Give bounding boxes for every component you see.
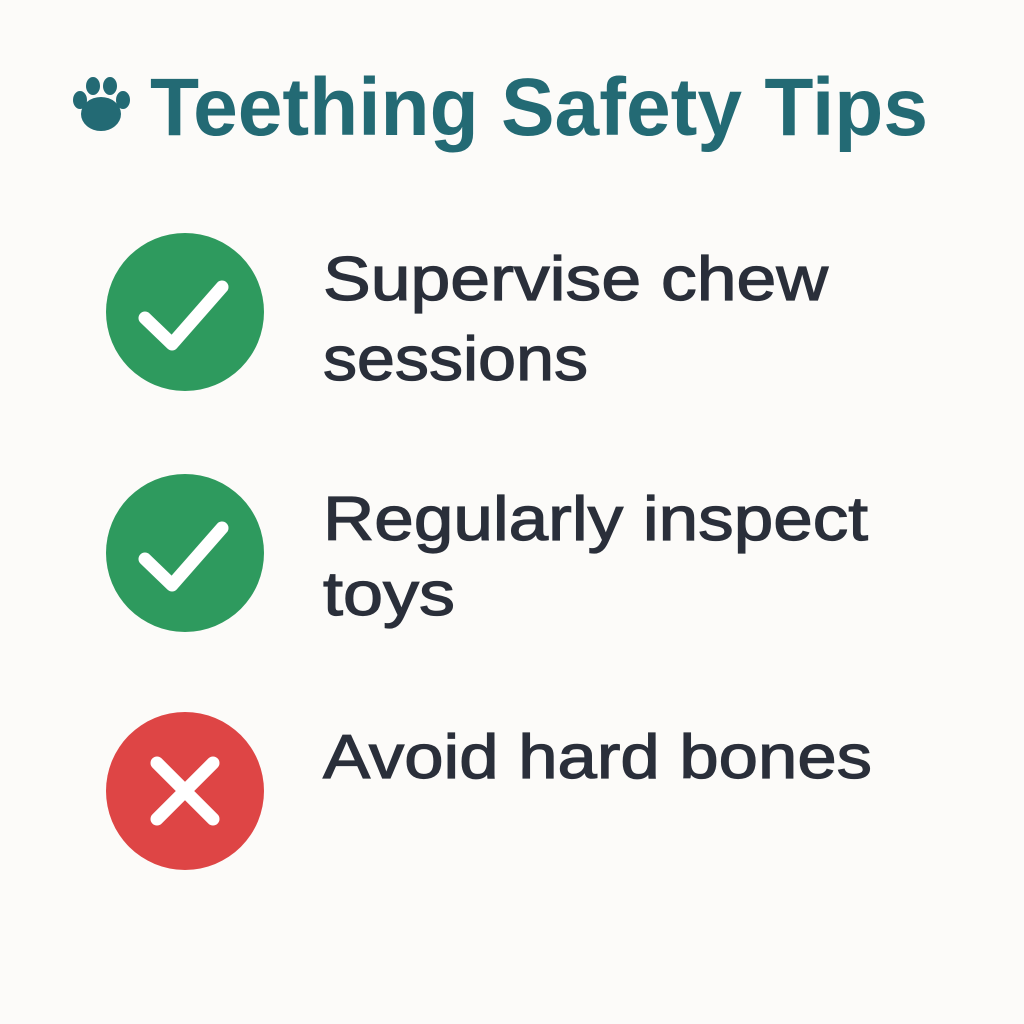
text: supervise chew sessions: Supervise chew — [323, 245, 828, 314]
text: avoid hard bones: Avoid hard bones — [323, 723, 872, 792]
title text: Teething Safety Tips — [150, 62, 928, 153]
icon: green check — [106, 474, 264, 632]
tip 2 — [106, 474, 868, 632]
icon: paw — [73, 77, 130, 131]
icon: red cross — [106, 712, 264, 870]
tip 3 — [106, 712, 872, 870]
text: regularly inspect toys: toys — [323, 560, 455, 629]
text: regularly inspect toys: Regularly inspect — [323, 485, 868, 554]
text: supervise chew sessions: sessions — [323, 325, 588, 394]
tip 1 — [106, 233, 828, 394]
title — [73, 62, 928, 153]
icon: green check — [106, 233, 264, 391]
